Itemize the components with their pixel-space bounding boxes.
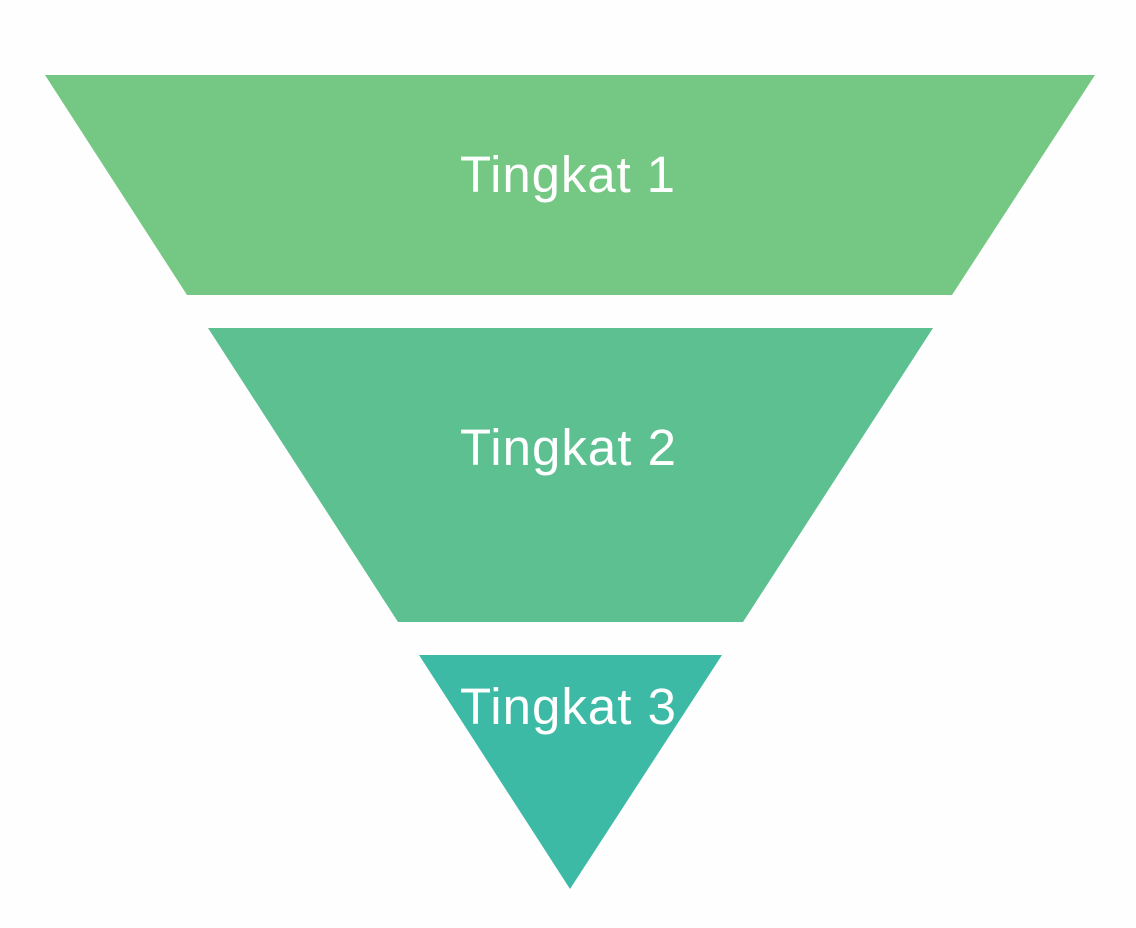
panel: tier 2: [208, 328, 933, 622]
panel: tier 1: Tingkat 1: [460, 146, 675, 203]
panel: tier 3: [419, 655, 722, 889]
panel: tier 3: Tingkat 3: [460, 678, 676, 735]
panel: tier 2: Tingkat 2: [460, 419, 676, 476]
panel: tier 1: [45, 75, 1095, 295]
